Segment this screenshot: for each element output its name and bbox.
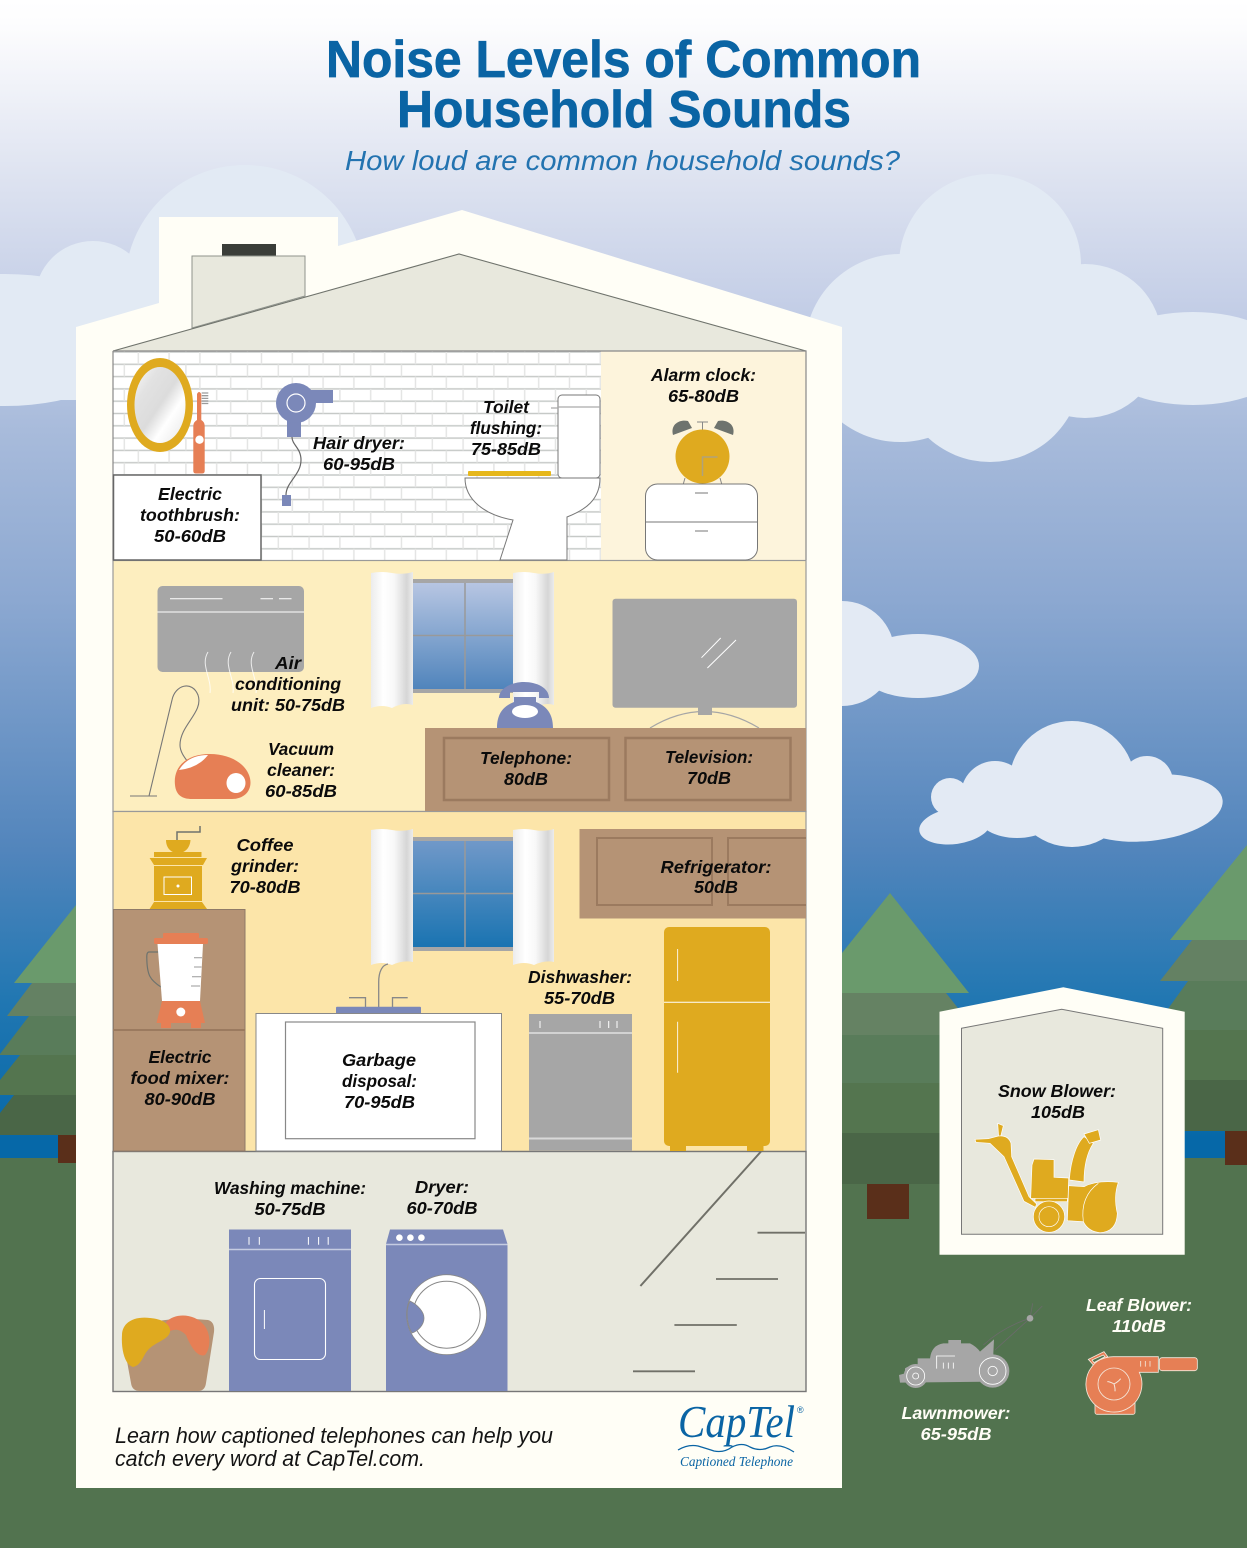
roof and chimney — [113, 244, 806, 351]
label: lawnmower — [902, 1403, 1010, 1444]
label: toilet flushing: Toilet — [483, 397, 530, 417]
icon: food mixer — [147, 933, 208, 1028]
upper cabinets: 50dB — [694, 877, 738, 897]
label: air conditioning: conditioning — [235, 674, 341, 694]
label: toilet flushing: flushing: — [470, 418, 542, 438]
footer text: catch every word at CapTel.com. — [115, 1446, 425, 1471]
label: dryer — [406, 1177, 478, 1218]
text box: electric toothbrush: Electric — [158, 484, 222, 504]
label: vacuum cleaner: cleaner: — [267, 760, 335, 780]
cabinet: telephone and television: 80dB — [504, 769, 548, 789]
cabinet: telephone and television: Telephone: — [480, 748, 572, 768]
icon: vacuum cleaner — [130, 686, 250, 799]
icon: stairs — [633, 1152, 805, 1371]
icon: dryer — [386, 1230, 508, 1391]
shelf with food mixer: 80-90dB — [144, 1089, 216, 1109]
logo: CapTel: CapTel — [678, 1396, 795, 1447]
label: leaf blower — [1086, 1295, 1192, 1336]
label: washing machine: Washing machine: — [214, 1178, 366, 1198]
label: dishwasher: Dishwasher: — [528, 967, 632, 987]
icon: washing machine — [229, 1230, 351, 1391]
label: leaf blower: Leaf Blower: — [1086, 1295, 1192, 1315]
footer text: Learn how captioned telephones can help you — [115, 1423, 553, 1448]
upper cabinets — [580, 829, 806, 918]
tree right — [1160, 845, 1247, 1165]
label: hair dryer: 60-95dB — [323, 454, 395, 474]
cloud: upper left — [0, 165, 365, 406]
label: leaf blower: 110dB — [1112, 1316, 1166, 1336]
label: alarm clock — [650, 365, 756, 406]
icon: television — [612, 599, 797, 728]
cabinet: telephone and television — [425, 728, 806, 811]
icon: telephone — [497, 682, 553, 728]
label: dishwasher: 55-70dB — [544, 988, 615, 1008]
icon: toilet — [465, 395, 600, 560]
subtitle: How loud are common household sounds? — [345, 145, 900, 176]
floor: kitchen — [113, 812, 806, 1152]
icon: air conditioning unit — [158, 586, 304, 693]
shelf with food mixer — [113, 910, 245, 1151]
garbage disposal cabinet: disposal: — [342, 1071, 417, 1091]
shed: Snow Blower: — [998, 1081, 1116, 1101]
label: washing machine: 50-75dB — [254, 1199, 326, 1219]
label: coffee grinder: Coffee — [236, 835, 294, 855]
title: Noise Levels of Common — [326, 31, 921, 89]
label: hair dryer: Hair dryer: — [313, 433, 405, 453]
icon: coffee grinder — [150, 826, 207, 909]
text box: electric toothbrush: toothbrush: — [140, 505, 240, 525]
text box: electric toothbrush — [114, 475, 261, 560]
cloud: upper right — [805, 174, 1247, 462]
tree left — [0, 905, 76, 1163]
label: washing machine — [214, 1178, 366, 1219]
label: vacuum cleaner: Vacuum — [268, 739, 334, 759]
icon: dishwasher — [529, 1014, 632, 1151]
cabinet: telephone and television: 70dB — [687, 768, 731, 788]
icon: lawnmower — [899, 1303, 1042, 1388]
garbage disposal cabinet — [256, 1014, 502, 1151]
label: coffee grinder: grinder: — [230, 856, 299, 876]
shelf with food mixer: food mixer: — [130, 1068, 230, 1088]
icon: leaf blower — [1086, 1352, 1197, 1414]
floor: bathroom and bedroom — [113, 351, 806, 560]
label: air conditioning: unit: 50-75dB — [231, 695, 345, 715]
house outline — [76, 210, 842, 1488]
title — [326, 31, 921, 139]
label: coffee grinder: 70-80dB — [230, 877, 300, 897]
logo: CapTel — [678, 1396, 804, 1470]
shed: 105dB — [1031, 1102, 1085, 1122]
garbage disposal cabinet: 70-95dB — [344, 1092, 415, 1112]
cloud: middle — [790, 601, 979, 706]
floor: living room — [113, 560, 806, 812]
icon: hair dryer — [276, 383, 333, 506]
label: vacuum cleaner: 60-85dB — [265, 781, 337, 801]
icon: alarm clock — [672, 421, 734, 485]
icon: electric toothbrush — [193, 392, 208, 474]
label: dryer: 60-70dB — [406, 1198, 478, 1218]
window: living room — [371, 572, 554, 708]
label: air conditioning — [231, 653, 345, 715]
label: toilet flushing: 75-85dB — [471, 439, 541, 459]
footer text — [115, 1423, 553, 1471]
label: lawnmower: Lawnmower: — [902, 1403, 1010, 1423]
garbage disposal cabinet: Garbage — [342, 1050, 416, 1070]
label: alarm clock: 65-80dB — [668, 386, 739, 406]
label: air conditioning: Air — [274, 653, 302, 673]
label: lawnmower: 65-95dB — [920, 1424, 992, 1444]
icon: mirror — [127, 358, 193, 452]
floor: basement — [113, 1152, 806, 1392]
text box: electric toothbrush: 50-60dB — [154, 526, 226, 546]
logo: CapTel: ® — [797, 1405, 804, 1415]
shelf with food mixer: Electric — [148, 1047, 212, 1067]
label: coffee grinder — [230, 835, 300, 897]
label: alarm clock: Alarm clock: — [650, 365, 756, 385]
cabinet: telephone and television: Television: — [665, 747, 753, 767]
window: kitchen — [371, 829, 554, 965]
icon: nightstand — [646, 484, 758, 560]
sky background — [0, 0, 1247, 1160]
icon: sink faucet — [336, 964, 421, 1014]
label: hair dryer — [313, 433, 405, 474]
ground — [0, 1158, 1247, 1548]
label: vacuum cleaner — [265, 739, 337, 801]
icon: laundry basket — [122, 1316, 214, 1391]
shed — [940, 987, 1185, 1255]
logo: CapTel: Captioned Telephone — [680, 1455, 793, 1470]
label: dishwasher — [528, 967, 632, 1008]
icon: snow blower — [975, 1123, 1118, 1233]
upper cabinets: Refrigerator: — [660, 857, 772, 877]
tree centre — [842, 893, 969, 1219]
title: Household Sounds — [397, 81, 851, 139]
label: toilet flushing — [470, 397, 542, 459]
icon: refrigerator — [664, 927, 770, 1151]
label: dryer: Dryer: — [415, 1177, 469, 1197]
cloud: lower right — [917, 721, 1226, 849]
